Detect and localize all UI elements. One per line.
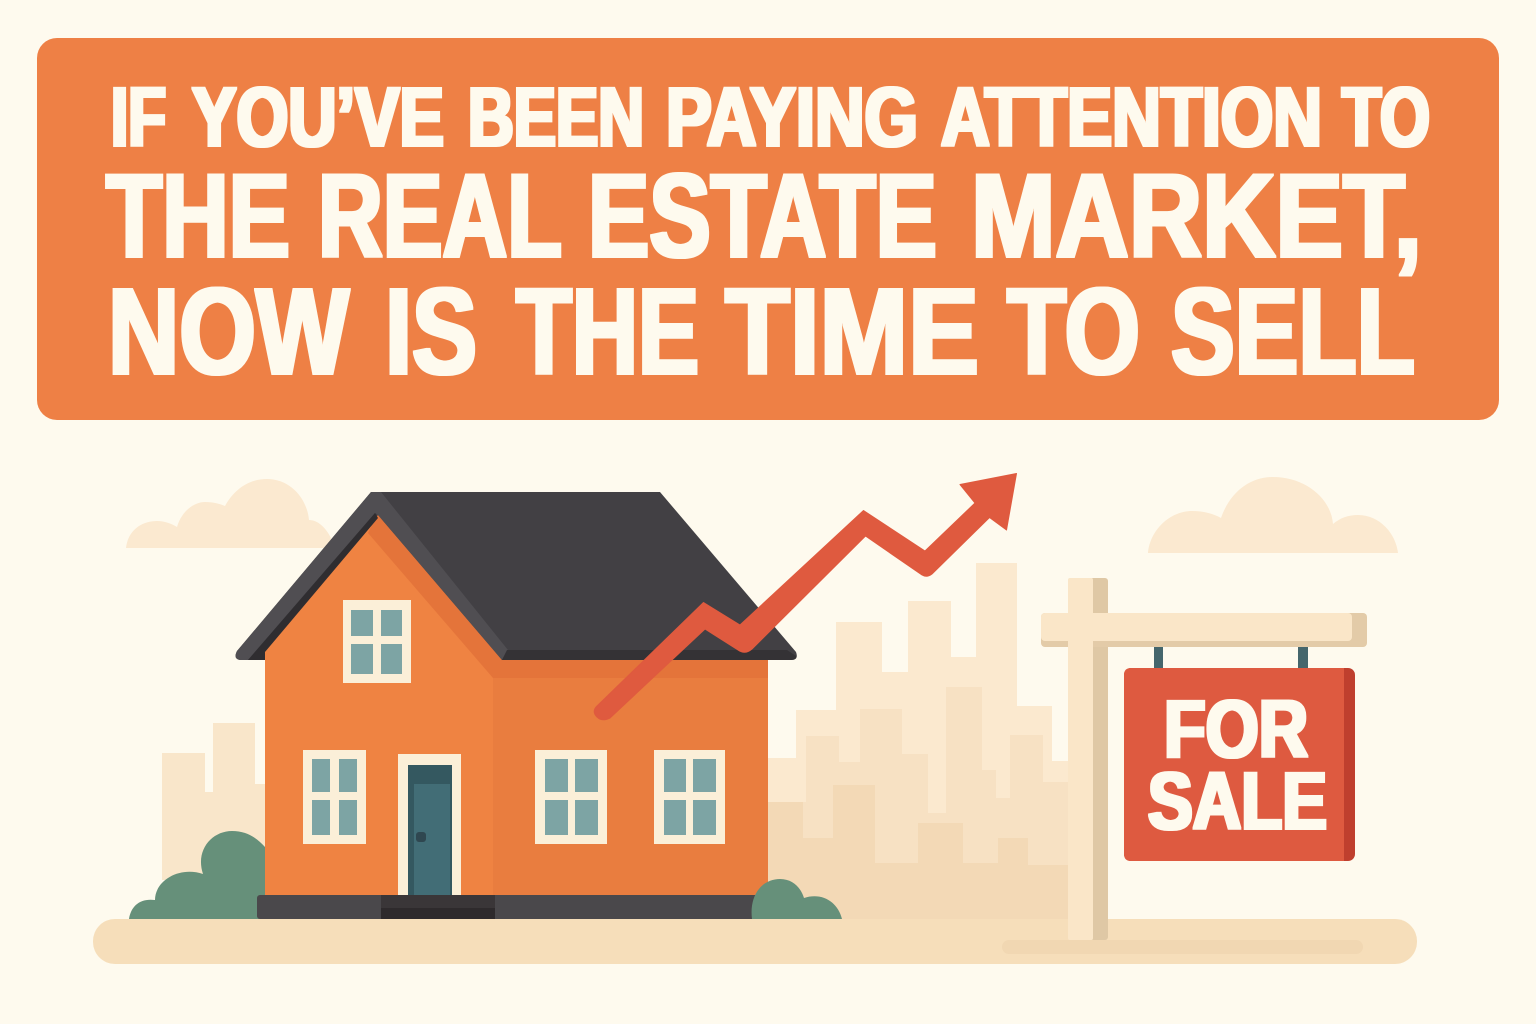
lower left window (303, 750, 366, 844)
title line 2: MARKET, (971, 149, 1422, 283)
title line 2: THE (106, 149, 290, 283)
title text (106, 70, 1430, 401)
title line 3: TO (1007, 264, 1140, 401)
sign hooks (1154, 647, 1163, 668)
lower middle window (535, 750, 607, 844)
sign text: FOR (1164, 684, 1308, 775)
title line 1 (111, 70, 1430, 164)
roof shadow on wall (368, 512, 768, 678)
house walls (265, 510, 768, 895)
title line 3: IS (385, 264, 477, 401)
foundation (257, 895, 768, 919)
door (398, 754, 461, 895)
title line 3: NOW (108, 264, 349, 401)
title line 2 (106, 149, 1422, 283)
title line 2: REAL (318, 149, 562, 283)
for sale sign (1002, 578, 1367, 954)
sign text (1148, 684, 1327, 847)
ground (93, 919, 1417, 964)
title line 1: YOU’VE (192, 70, 444, 164)
post base shadow (1002, 940, 1363, 954)
skyline left (162, 723, 266, 880)
sign board (1124, 668, 1355, 861)
upper window (343, 600, 411, 683)
title line 1: IF (111, 70, 166, 164)
bush right (752, 879, 842, 919)
title line 1: PAYING (666, 70, 918, 164)
title line 1: TO (1342, 70, 1430, 164)
title line 3: SELL (1171, 264, 1415, 401)
roof (236, 492, 797, 660)
sign text: SALE (1148, 756, 1327, 847)
rising arrow (594, 474, 1016, 720)
title line 3 (108, 264, 1415, 401)
sign post (1090, 578, 1108, 940)
skyline right (768, 563, 1068, 919)
title line 1: ATTENTION (941, 70, 1322, 164)
title banner (37, 38, 1499, 420)
sign arm (1041, 613, 1367, 647)
title line 1: BEEN (468, 70, 644, 164)
title line 3: TIME (725, 264, 979, 401)
cloud left (126, 479, 331, 548)
title line 3: THE (516, 264, 699, 401)
bush left (129, 831, 265, 919)
cloud right (1148, 477, 1398, 553)
lower right window (654, 750, 725, 844)
house (236, 492, 797, 919)
title line 2: ESTATE (588, 149, 937, 283)
